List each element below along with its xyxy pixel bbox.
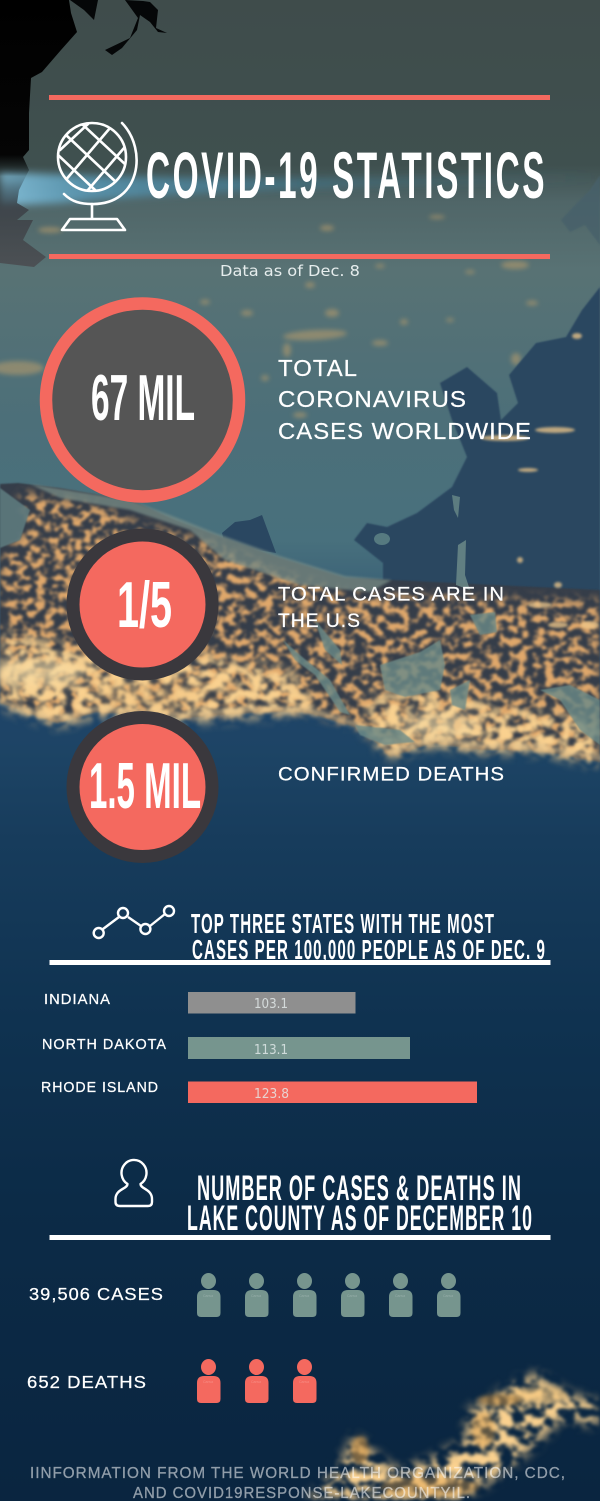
horizon glow bbox=[0, 172, 600, 206]
row: North Dakota bbox=[42, 1037, 410, 1059]
stat description: THE U.S bbox=[278, 610, 361, 632]
deaths label: 652 DEATHS bbox=[27, 1372, 147, 1392]
pictogram: deaths bbox=[197, 1359, 316, 1403]
bar chart: cases per 100,000 bbox=[41, 992, 477, 1103]
bright coastal lights bbox=[0, 630, 600, 765]
row: Indiana bbox=[44, 992, 356, 1014]
heading: top three states bbox=[191, 908, 546, 965]
icon: line trend bbox=[94, 906, 174, 938]
stat description bbox=[278, 355, 532, 444]
stat description: CASES WORLDWIDE bbox=[278, 418, 532, 444]
row: Indiana: INDIANA bbox=[44, 992, 111, 1008]
icon: globe bbox=[58, 123, 137, 230]
date note: Data as of Dec. 8 bbox=[220, 262, 360, 280]
pictogram: deaths: Canva bbox=[251, 1380, 261, 1384]
bright lights on right land bbox=[481, 333, 599, 629]
stat description: TOTAL bbox=[278, 355, 358, 381]
pale lakes bbox=[283, 612, 600, 745]
land band with lights bbox=[0, 483, 600, 762]
dark inlet bbox=[70, 0, 167, 55]
icon: person outline bbox=[116, 1160, 152, 1206]
source credit bbox=[30, 1465, 566, 1501]
row: North Dakota: 113.1 bbox=[254, 1043, 288, 1058]
row: Indiana: 103.1 bbox=[254, 997, 288, 1012]
row: Rhode Island bbox=[41, 1080, 477, 1103]
circle badge: 1/5 bbox=[117, 568, 172, 641]
second rule bbox=[49, 254, 550, 259]
city lights bottom right bbox=[306, 1373, 600, 1501]
pictogram: cases: Canva bbox=[251, 1294, 261, 1298]
circle badge bbox=[73, 718, 212, 856]
stat description bbox=[278, 584, 505, 632]
pictogram: cases: Canva bbox=[347, 1294, 357, 1298]
stat: one fifth in the U.S. bbox=[73, 535, 505, 674]
circle badge bbox=[73, 535, 212, 674]
row: Rhode Island: 123.8 bbox=[254, 1087, 289, 1102]
dark land at top left bbox=[0, 0, 77, 267]
rule under states heading bbox=[50, 960, 550, 965]
cases label: 39,506 CASES bbox=[29, 1284, 164, 1304]
top rule bbox=[49, 95, 550, 100]
pale coast strip bbox=[30, 484, 392, 592]
pictogram: cases bbox=[197, 1273, 460, 1317]
rule under Lake County heading bbox=[50, 1235, 550, 1240]
pictogram: deaths: Canva bbox=[299, 1380, 309, 1384]
pictogram: deaths: Canva bbox=[203, 1380, 213, 1384]
faint city lights bbox=[0, 215, 538, 418]
stat description: CONFIRMED DEATHS bbox=[278, 764, 505, 786]
pictogram: cases: Canva bbox=[395, 1294, 405, 1298]
heading: Lake County bbox=[187, 1169, 533, 1238]
land: upper right (dark blue) bbox=[354, 287, 600, 625]
stat description: CORONAVIRUS bbox=[278, 386, 467, 412]
stat description: TOTAL CASES ARE IN bbox=[278, 584, 505, 606]
small land at upper right bbox=[561, 175, 600, 245]
row: Rhode Island: RHODE ISLAND bbox=[41, 1080, 159, 1096]
stat: 1.5 million deaths bbox=[73, 718, 505, 856]
pictogram: cases: Canva bbox=[443, 1294, 453, 1298]
stat: 67 million total cases bbox=[46, 304, 532, 496]
source credit: IINFORMATION FROM THE WORLD HEALTH ORGANIZATION, CDC, bbox=[30, 1465, 566, 1482]
circle badge bbox=[46, 304, 239, 496]
circle badge: 67 MIL bbox=[91, 361, 195, 434]
pictogram: cases: Canva bbox=[299, 1294, 309, 1298]
circle badge: 1.5 MIL bbox=[89, 749, 201, 822]
row: North Dakota: NORTH DAKOTA bbox=[42, 1037, 167, 1053]
pictogram: cases: Canva bbox=[203, 1294, 213, 1298]
